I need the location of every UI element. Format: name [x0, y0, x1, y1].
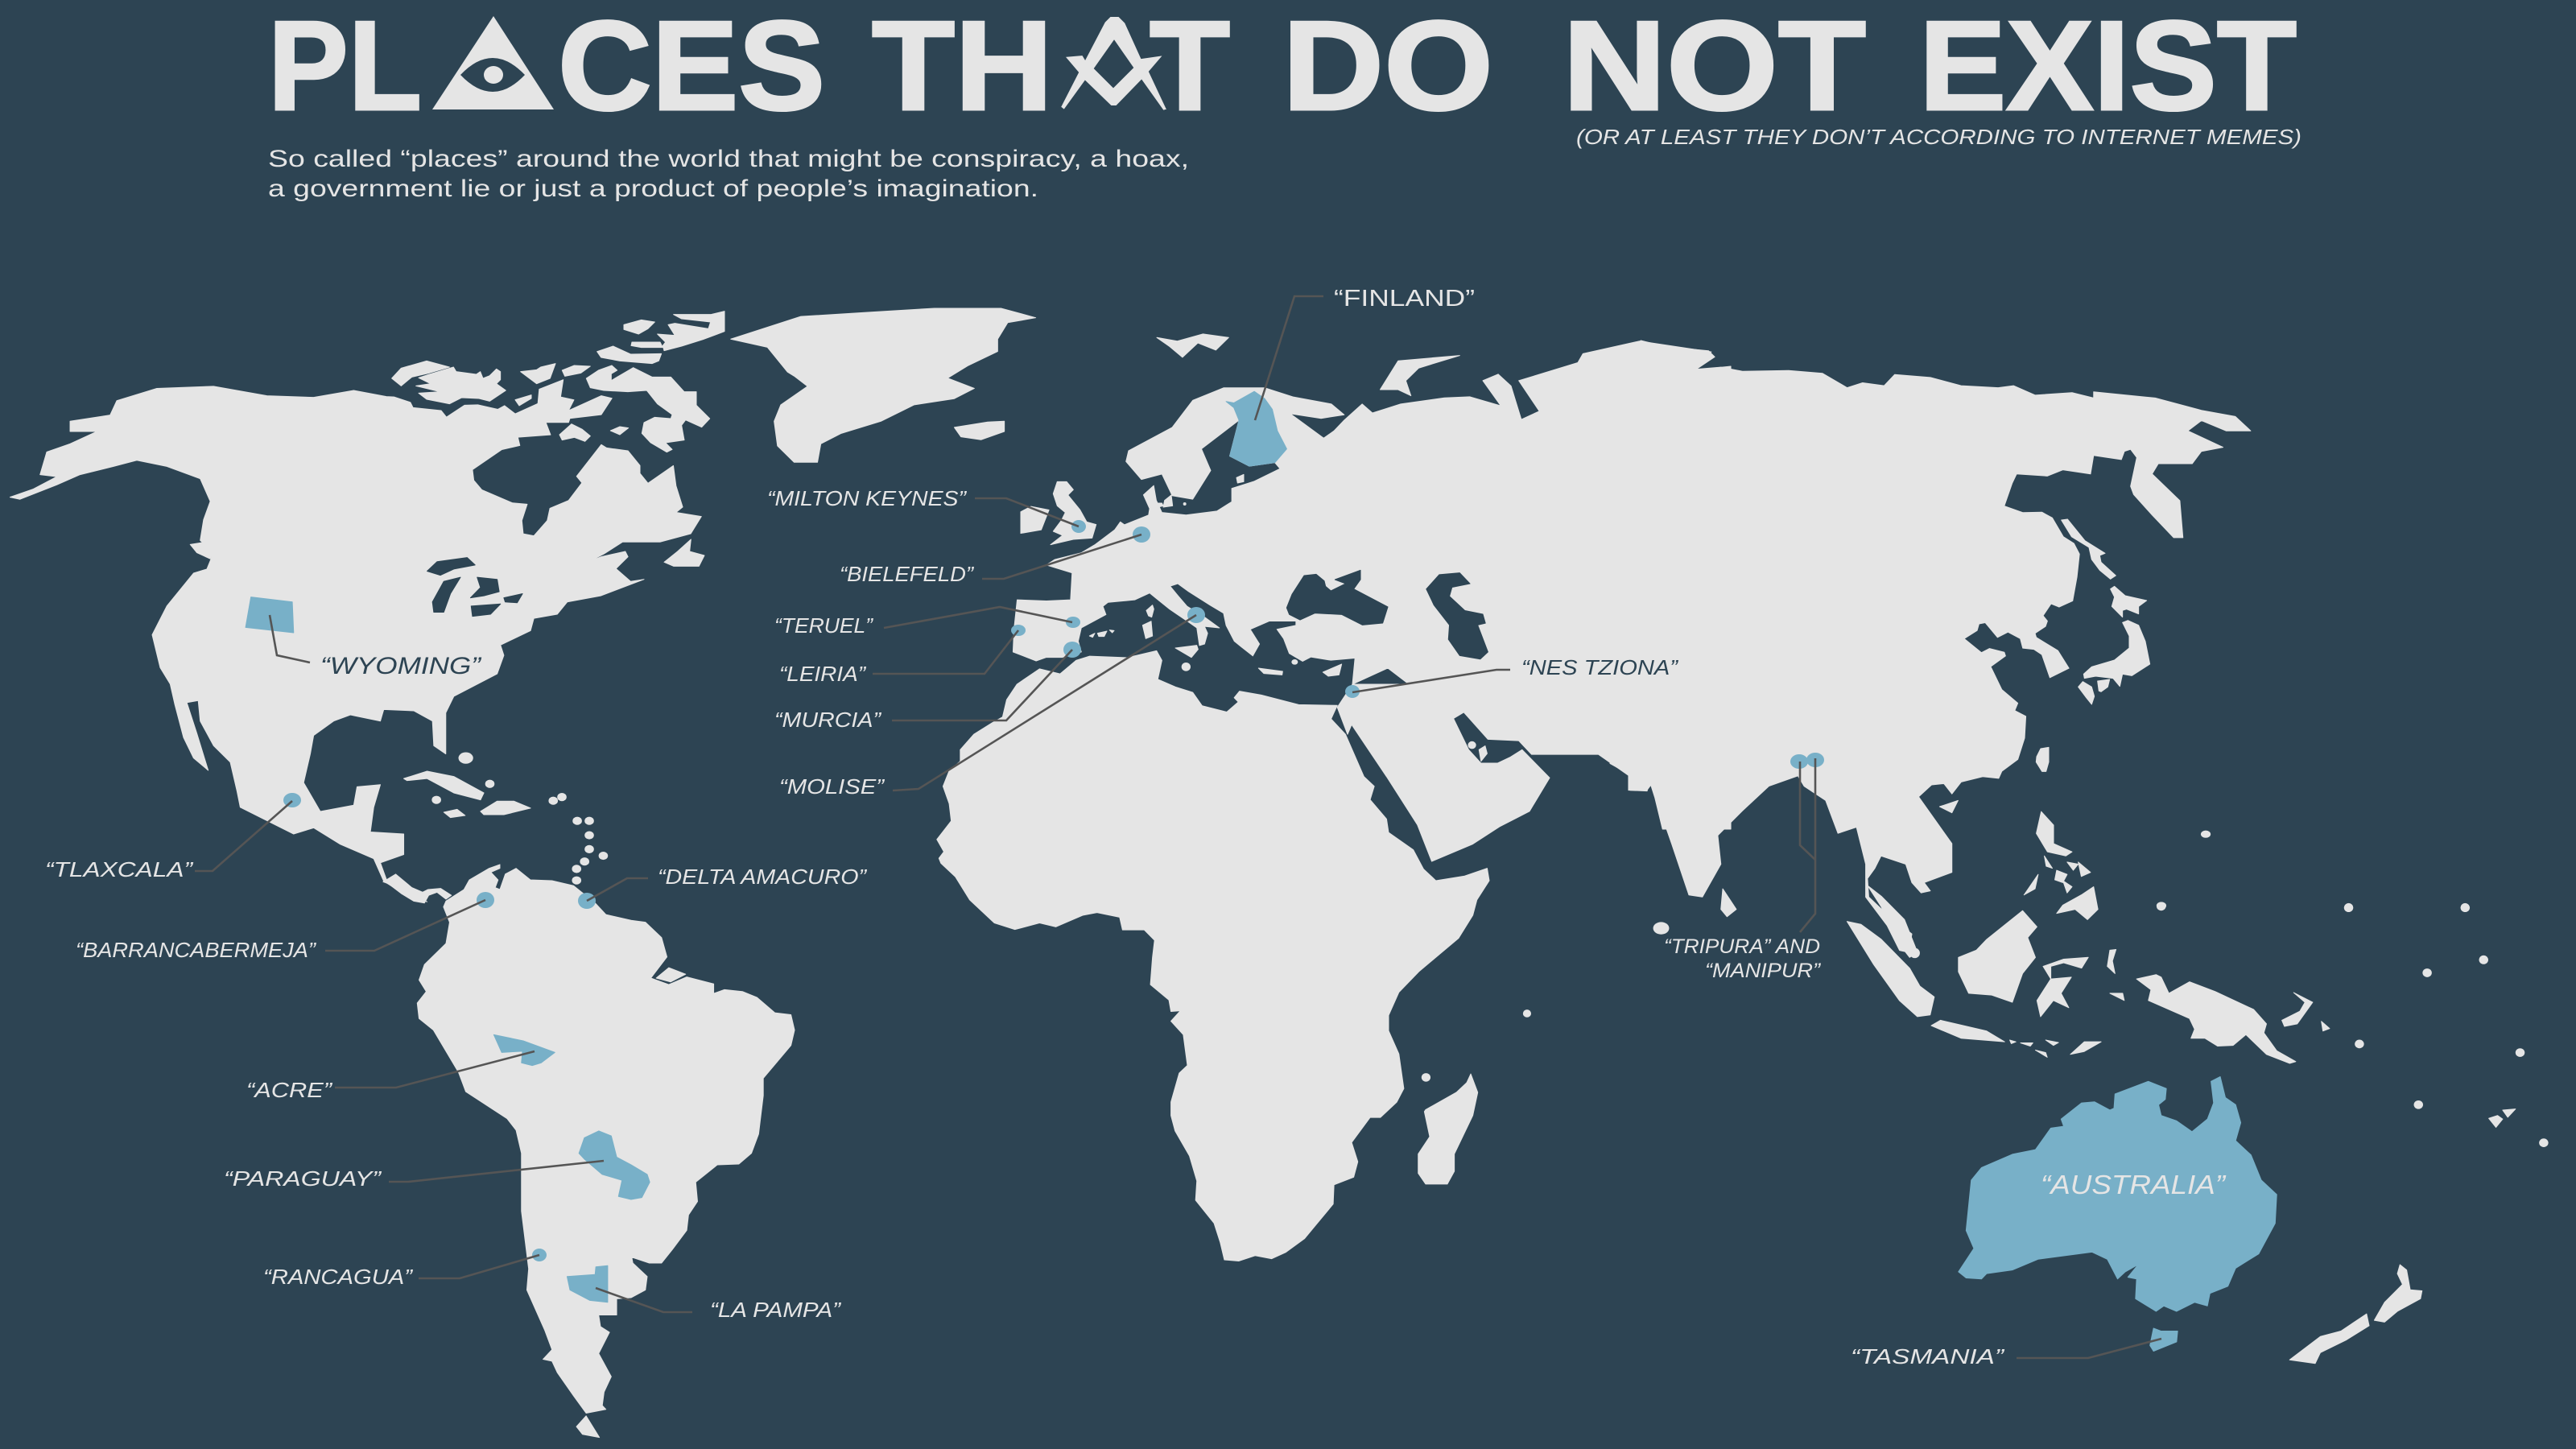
- label: Leiria: “LEIRIA”: [779, 662, 866, 686]
- label: Acre: “ACRE”: [246, 1078, 333, 1102]
- land: east asia: [1610, 341, 2488, 964]
- black sea: [1286, 570, 1388, 625]
- label: Milton Keynes: “MILTON KEYNES”: [767, 486, 967, 510]
- label: Tripura and Manipur: “TRIPURA” AND: [1664, 935, 1820, 958]
- intro text: So called “places” around the world that might be conspiracy, a hoax,: [268, 146, 1189, 172]
- world map: [10, 308, 2549, 1438]
- leader lines: [195, 296, 2161, 1358]
- regions: australia and tasmania: [1959, 1076, 2277, 1352]
- label: Bielefeld: “BIELEFELD”: [840, 562, 974, 586]
- label: Paraguay: “PARAGUAY”: [224, 1166, 382, 1191]
- intro text: a government lie or just a product of people’s imagination.: [268, 175, 1038, 202]
- land: canadian arctic islands: [392, 312, 724, 566]
- label: Murcia: “MURCIA”: [774, 708, 881, 732]
- label: Australia: “AUSTRALIA”: [2041, 1170, 2227, 1199]
- land: japan, sakhalin, taiwan: [2036, 519, 2150, 771]
- land: europe and western asia: [1013, 334, 1731, 829]
- inland seas: [1426, 573, 1488, 659]
- label: Delta Amacuro: “DELTA AMACURO”: [658, 865, 867, 889]
- great lakes: [427, 558, 522, 617]
- icon: all-seeing eye triangle: [432, 16, 554, 109]
- icon: square and compass: [1060, 16, 1167, 111]
- title: [268, 0, 2297, 137]
- intro text: [268, 146, 1189, 202]
- map labels: [45, 286, 2227, 1368]
- land: british isles and mediterranean islands: [1051, 474, 1342, 676]
- label: Wyoming: “WYOMING”: [320, 653, 482, 679]
- land: africa and arabia: [937, 650, 1550, 1261]
- label: Finland: “FINLAND”: [1334, 286, 1475, 312]
- region: finland: [1226, 391, 1286, 466]
- label: Tlaxcala: “TLAXCALA”: [45, 857, 194, 881]
- land: southeast asia and pacific islands: [1847, 886, 2549, 1364]
- label: Teruel: “TERUEL”: [774, 613, 873, 638]
- label: La Pampa: “LA PAMPA”: [710, 1298, 842, 1322]
- label: Tasmania: “TASMANIA”: [1851, 1344, 2005, 1368]
- land: south america: [383, 865, 795, 1438]
- label: Tripura and Manipur: [1664, 935, 1822, 982]
- location dots: [283, 520, 1824, 1261]
- subtitle note: (OR AT LEAST THEY DON’T ACCORDING TO INTERNET MEMES): [1576, 125, 2301, 149]
- regions: acre, paraguay, la pampa: [493, 1034, 650, 1302]
- label: Molise: “MOLISE”: [779, 774, 885, 799]
- land: north america, greenland, caribbean: [10, 308, 1036, 902]
- label: Rancagua: “RANCAGUA”: [263, 1265, 414, 1289]
- region: wyoming: [246, 597, 294, 633]
- label: Barrancabermeja: “BARRANCABERMEJA”: [76, 938, 316, 962]
- label: Tripura and Manipur: “MANIPUR”: [1705, 960, 1822, 982]
- label: Nes Tziona: “NES TZIONA”: [1521, 655, 1678, 679]
